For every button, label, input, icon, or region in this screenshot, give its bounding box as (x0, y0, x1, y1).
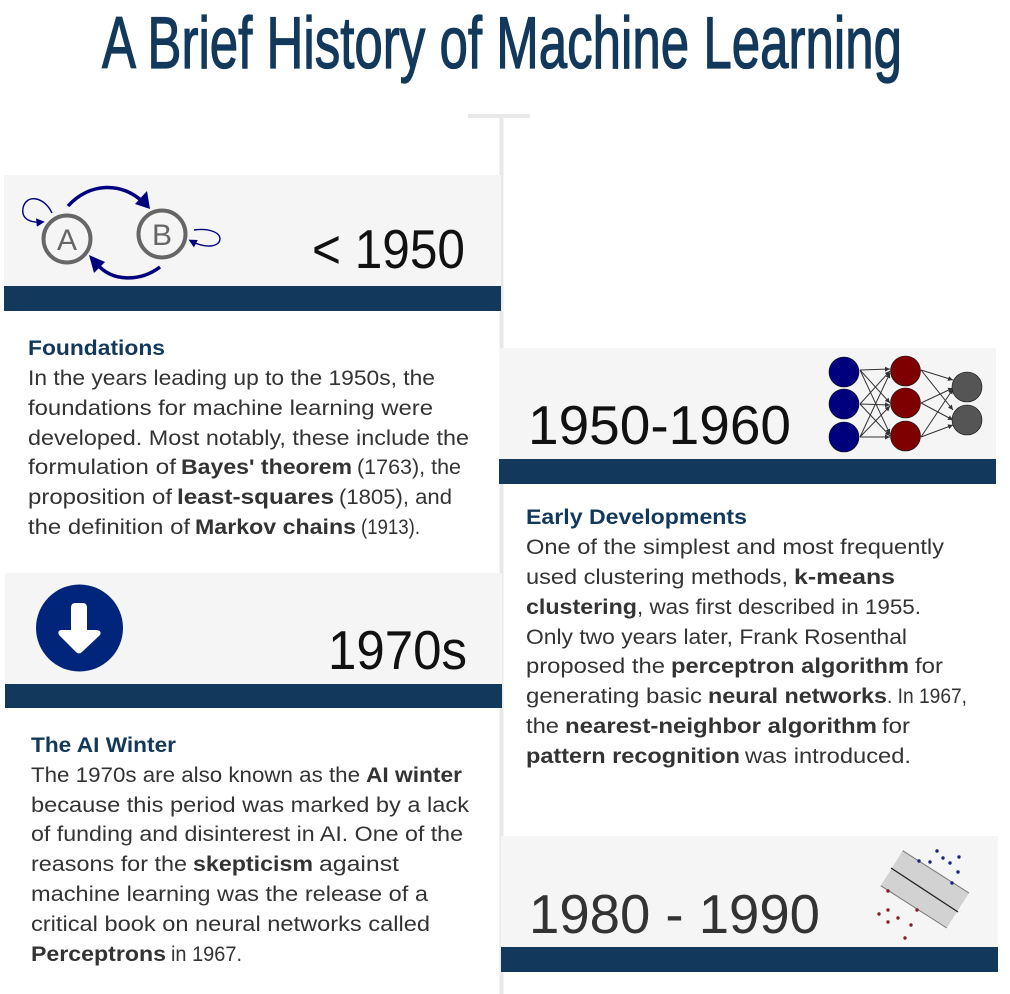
text block (28, 367, 469, 539)
icon: Markov chain: A (57, 224, 77, 257)
text block: developed. Most notably, these include the (28, 427, 469, 450)
text block: perceptron algorithm (671, 655, 909, 678)
icon: support vector machine (877, 849, 969, 940)
text block: used clustering methods, (526, 566, 788, 589)
text block: . In 1967, (887, 685, 967, 708)
year label: 1970s (328, 619, 467, 681)
panel: before 1950 (4, 175, 501, 539)
text block: Only two years later, Frank Rosenthal (526, 626, 907, 649)
text block: (1913). (361, 516, 420, 539)
header bar (5, 684, 502, 708)
text block: Markov chains (195, 516, 356, 539)
text block (526, 536, 967, 768)
text block: pattern recognition (526, 745, 740, 768)
text block: clustering (526, 596, 637, 619)
text block: reasons for the (31, 853, 187, 876)
text block: critical book on neural networks called (31, 913, 430, 936)
year label: 1980 - 1990 (529, 883, 820, 945)
text block: Perceptrons (31, 943, 166, 966)
text block: (1805), and (339, 486, 452, 509)
year label: < 1950 (312, 218, 465, 280)
heading: The AI Winter (31, 734, 176, 757)
text block: for (882, 715, 910, 738)
timeline axis (468, 114, 530, 994)
text block: against (319, 853, 399, 876)
text block: proposition of (28, 486, 172, 509)
header bar (501, 947, 998, 972)
panel header background (5, 573, 502, 684)
text block: generating basic (526, 685, 702, 708)
panel: 1950-1960 (499, 348, 996, 768)
text block: of funding and disinterest in AI. One of the (31, 823, 463, 846)
heading: Foundations (28, 337, 165, 360)
icon: Markov chain (23, 187, 220, 278)
text block: was introduced. (744, 745, 911, 768)
text block: proposed the (526, 655, 665, 678)
text block: the definition of (28, 516, 190, 539)
text block: because this period was marked by a lack (31, 794, 470, 817)
text block: One of the simplest and most frequently (526, 536, 945, 559)
text block: In the years leading up to the 1950s, the (28, 367, 435, 390)
panel header background (501, 836, 998, 947)
text block: nearest-neighbor algorithm (565, 715, 877, 738)
text block: , was first described in 1955. (637, 596, 921, 619)
text block: for (915, 655, 943, 678)
text block: foundations for machine learning were (28, 397, 433, 420)
text block: skepticism (193, 853, 313, 876)
icon: neural network (829, 356, 982, 452)
panel header background (499, 348, 996, 459)
icon: Markov chain: B (152, 219, 172, 252)
text block: least-squares (177, 486, 334, 509)
heading: Early Developments (526, 506, 747, 529)
panel header background (4, 175, 501, 286)
text block: Bayes' theorem (181, 456, 352, 479)
panel: 1970s (5, 573, 502, 966)
text block: machine learning was the release of a (31, 883, 428, 906)
text block: formulation of (28, 456, 176, 479)
text block: k-means (794, 566, 895, 589)
year label: 1950-1960 (528, 394, 791, 456)
text block (31, 764, 470, 966)
icon: down arrow (36, 584, 123, 672)
text block: the (526, 715, 559, 738)
header bar (499, 459, 996, 484)
panel: 1980-1990 (501, 836, 998, 972)
text block: The 1970s are also known as the (31, 764, 360, 787)
text block: (1763), the (357, 456, 461, 479)
text block: in 1967. (171, 943, 242, 966)
text block: AI winter (366, 764, 462, 787)
header bar (4, 286, 501, 311)
text block: neural networks (708, 685, 887, 708)
